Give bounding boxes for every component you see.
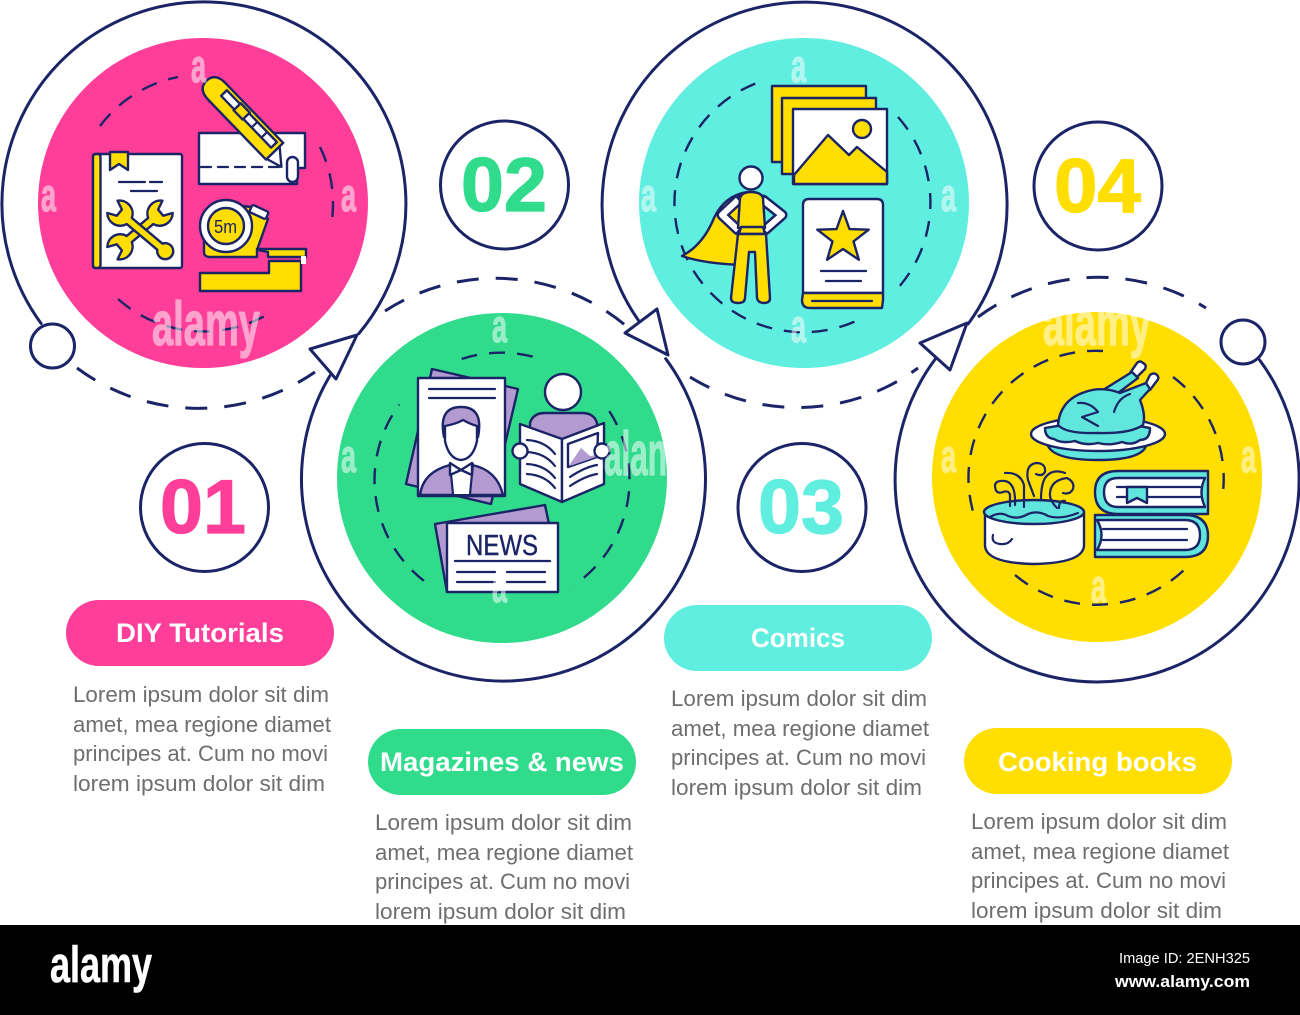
text block: step 3 description: principes at. Cum no movi [671,745,926,770]
panel: step 2 magazines and news circle [337,300,667,643]
text block: step 1 description [73,682,331,796]
icon: measuring tape: 5m [214,217,237,237]
watermark marks: a [941,169,956,221]
text block: step 3 description: lorem ipsum dolor sit dim [671,775,922,800]
icon: paper being cut [199,133,305,184]
watermark marks: a [341,169,356,221]
text block: step 4 description [971,809,1229,923]
clipped watermark above icons: alamy [1043,290,1151,359]
icon: steaming pot [984,463,1084,564]
text block: step 2 description [375,810,633,924]
icon: superhero with cape [682,166,782,303]
footer bar: stock image credit: www.alamy.com [1114,972,1250,991]
panel: step 4 cooking books circle [932,290,1262,642]
watermark marks: a [41,169,56,221]
arrow: step 3 to 4 [920,323,967,370]
heading pill: DIY Tutorials [66,600,334,666]
number badge 03 [738,444,866,572]
watermark marks: a [791,300,806,352]
footer bar: stock image credit: alamy [50,936,152,993]
panel: step 3 comics circle [639,38,969,368]
timeline: connected outline rings and dashed arcs [2,2,1299,682]
footer bar: stock image credit [0,925,1300,1015]
text block: step 4 description: principes at. Cum no movi [971,868,1226,893]
number badge 04: 04 [1054,144,1141,229]
arrow: step 1 to 2 [310,335,357,379]
watermark marks [941,430,1256,612]
text block: step 4 description: amet, mea regione diamet [971,839,1229,864]
text block: step 2 description: Lorem ipsum dolor sit dim [375,810,632,835]
watermark marks: a [492,560,507,612]
start node [30,324,74,368]
arrow: step 2 to 3 [625,309,668,355]
text block: step 2 description: amet, mea regione diamet [375,840,633,865]
watermark marks: a [1241,430,1256,482]
text block: step 2 description: lorem ipsum dolor sit dim [375,899,626,924]
text block: step 3 description [671,686,929,800]
number badge 01 [140,444,268,572]
heading pill: Cooking books [964,728,1232,794]
icon: newspaper [435,505,558,592]
number badge 04 [1034,122,1162,250]
icon: portrait magazine [406,369,518,504]
watermark marks [41,40,356,359]
watermark marks [341,300,667,612]
watermark marks: a [341,430,356,482]
panel: step 1 DIY tutorials circle [38,38,368,368]
text block: step 3 description: Lorem ipsum dolor sit dim [671,686,927,711]
text block: step 1 description: Lorem ipsum dolor sit dim [73,682,329,707]
heading pill: Comics [664,605,932,671]
icon: newspaper: NEWS [466,530,538,562]
heading pill: Magazines & news [368,729,636,795]
heading pill: Magazines & news: Magazines & news [380,747,624,777]
text block: step 2 description: principes at. Cum no movi [375,869,630,894]
watermark marks: a [941,430,956,482]
text block: step 1 description: amet, mea regione diamet [73,712,331,737]
watermark marks [641,40,956,352]
text block: step 1 description: principes at. Cum no movi [73,741,328,766]
watermark marks: a [641,169,656,221]
text block: step 4 description: lorem ipsum dolor sit dim [971,898,1222,923]
heading pill: Comics: Comics [751,623,845,653]
icon: stacked pictures [772,86,887,184]
number badge 03: 03 [758,465,844,550]
number badge 01: 01 [160,465,246,550]
heading pill: Cooking books: Cooking books [998,747,1197,777]
text block: step 3 description: amet, mea regione diamet [671,716,929,741]
icon: roast chicken on plate [1031,362,1165,460]
text block: step 4 description: Lorem ipsum dolor sit dim [971,809,1227,834]
watermark marks: a [791,40,806,92]
watermark marks: alamy [152,290,260,359]
icon: stacked books [1095,471,1208,557]
end node [1221,320,1265,364]
number badge 02 [440,121,568,249]
heading pill: DIY Tutorials: DIY Tutorials [116,618,284,648]
icon: person reading magazine [512,374,610,502]
text block: step 1 description: lorem ipsum dolor sit dim [73,771,325,796]
icon: manual book with wrenches [93,152,182,268]
watermark marks: alan [604,420,667,489]
footer bar: stock image credit: Image ID: 2ENH325 [1119,950,1250,967]
watermark marks: a [1091,560,1106,612]
number badge 02: 02 [461,143,547,228]
icon: measuring tape [200,200,306,291]
watermark marks: a [492,300,507,352]
icon: comic book with star [802,199,883,308]
watermark marks: a [191,40,206,92]
icon: craft knife [198,72,294,171]
